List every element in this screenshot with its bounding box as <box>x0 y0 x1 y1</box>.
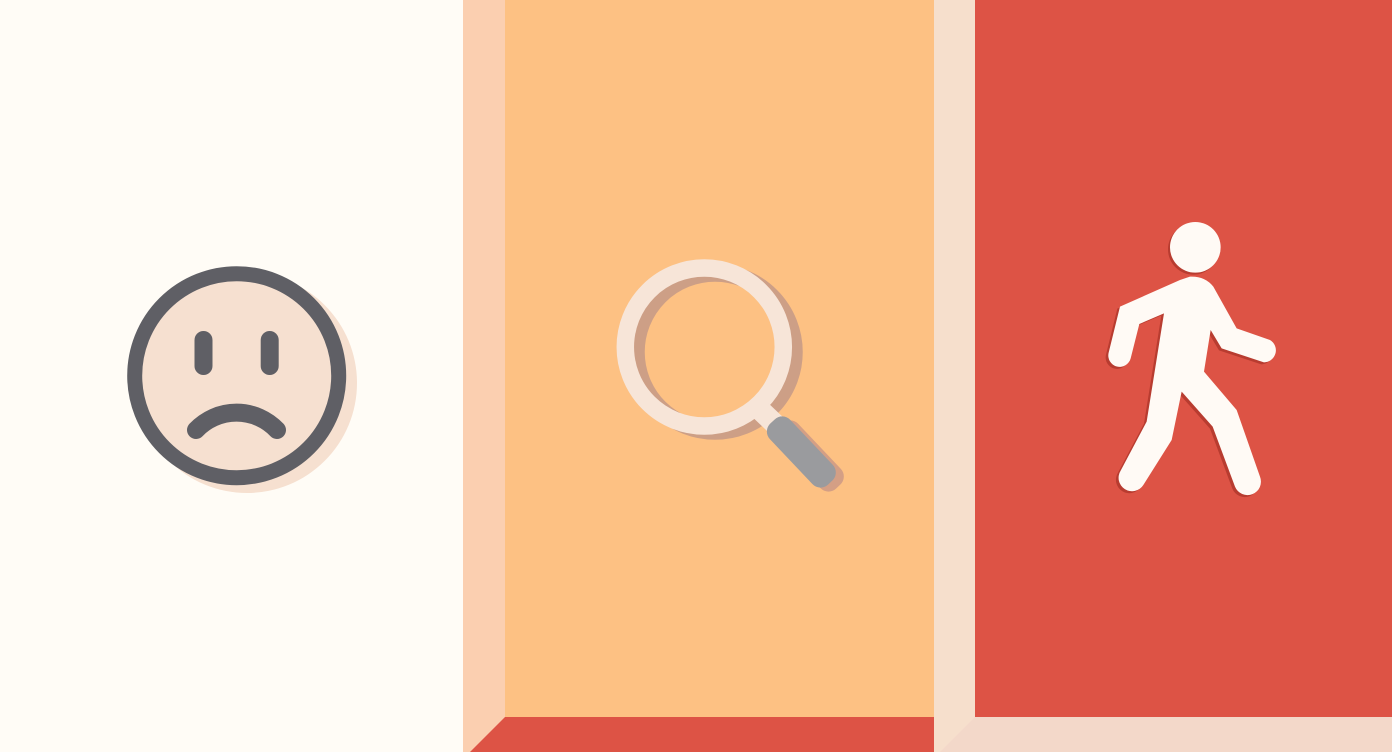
icon: sad face <box>135 273 357 493</box>
panel: problem (cream) <box>0 0 463 752</box>
icon: magnifying glass <box>625 268 848 496</box>
panel: search (orange) <box>463 0 934 752</box>
icon: walking person <box>1106 222 1276 497</box>
panel: action (red) <box>934 0 1392 752</box>
